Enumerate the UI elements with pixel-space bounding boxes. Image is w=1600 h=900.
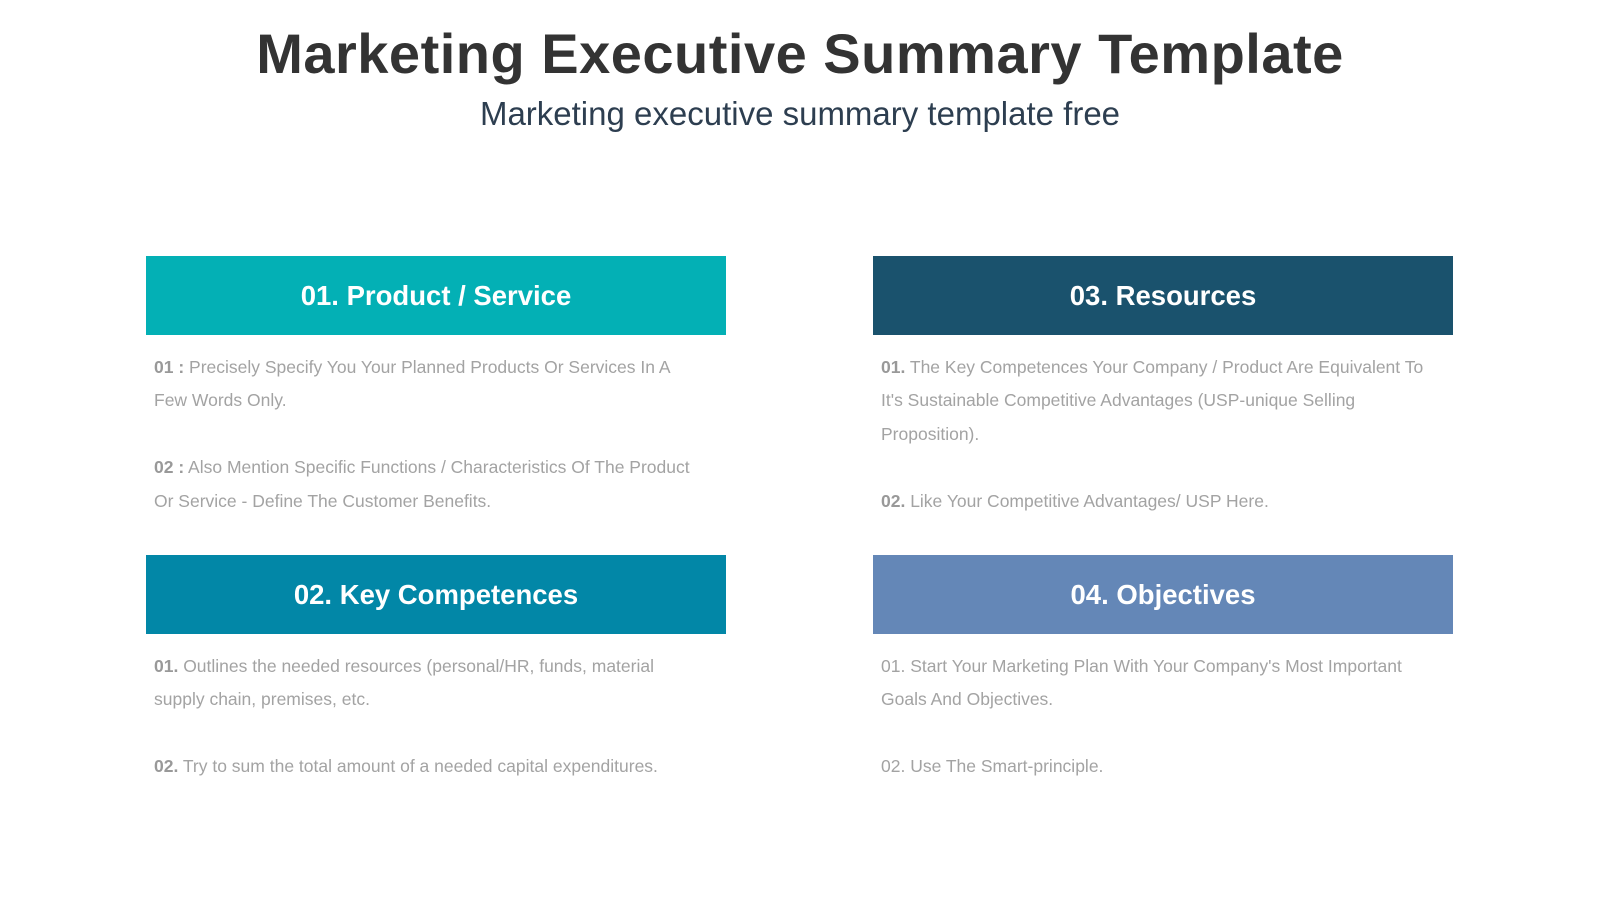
panel header: resources bbox=[873, 256, 1453, 335]
panel header: key competences: 02. Key Competences bbox=[294, 578, 578, 610]
text: product/service bbox=[154, 357, 690, 511]
text: resources bbox=[881, 357, 1423, 511]
title: Marketing Executive Summary Template bbox=[256, 22, 1344, 85]
text: objectives: 02. Use The Smart-principle. bbox=[881, 756, 1103, 776]
panel header: resources: 03. Resources bbox=[1070, 280, 1256, 310]
text: product/service: 02 : Also Mention Specific Functions / Characteristics Of The Product Or Service - Define The Customer Benefits. bbox=[154, 457, 690, 511]
text: key competences: 01. Outlines the needed resources (personal/HR, funds, material supply chain, premises, etc. bbox=[154, 656, 654, 709]
text: key competences: 02. Try to sum the total amount of a needed capital expenditures. bbox=[154, 756, 658, 776]
panel header: key competences bbox=[146, 555, 726, 634]
subtitle: Marketing executive summary template free bbox=[480, 95, 1120, 132]
panel header: objectives bbox=[873, 555, 1453, 634]
text: objectives bbox=[881, 656, 1402, 776]
panel header: product/service bbox=[146, 256, 726, 335]
panel header: product/service: 01. Product / Service bbox=[301, 280, 571, 310]
text: product/service: 01 : Precisely Specify You Your Planned Products Or Services In A Few Words Only. bbox=[154, 357, 670, 410]
panel header: objectives: 04. Objectives bbox=[1071, 578, 1255, 610]
text: key competences bbox=[154, 656, 658, 776]
text: objectives: 01. Start Your Marketing Plan With Your Company's Most Important Goals And Objectives. bbox=[881, 656, 1402, 709]
text: resources: 02. Like Your Competitive Advantages/ USP Here. bbox=[881, 491, 1269, 511]
text: resources: 01. The Key Competences Your Company / Product Are Equivalent To It's Sustainable Competitive Advantages (USP-unique Selling Proposition). bbox=[881, 357, 1423, 444]
